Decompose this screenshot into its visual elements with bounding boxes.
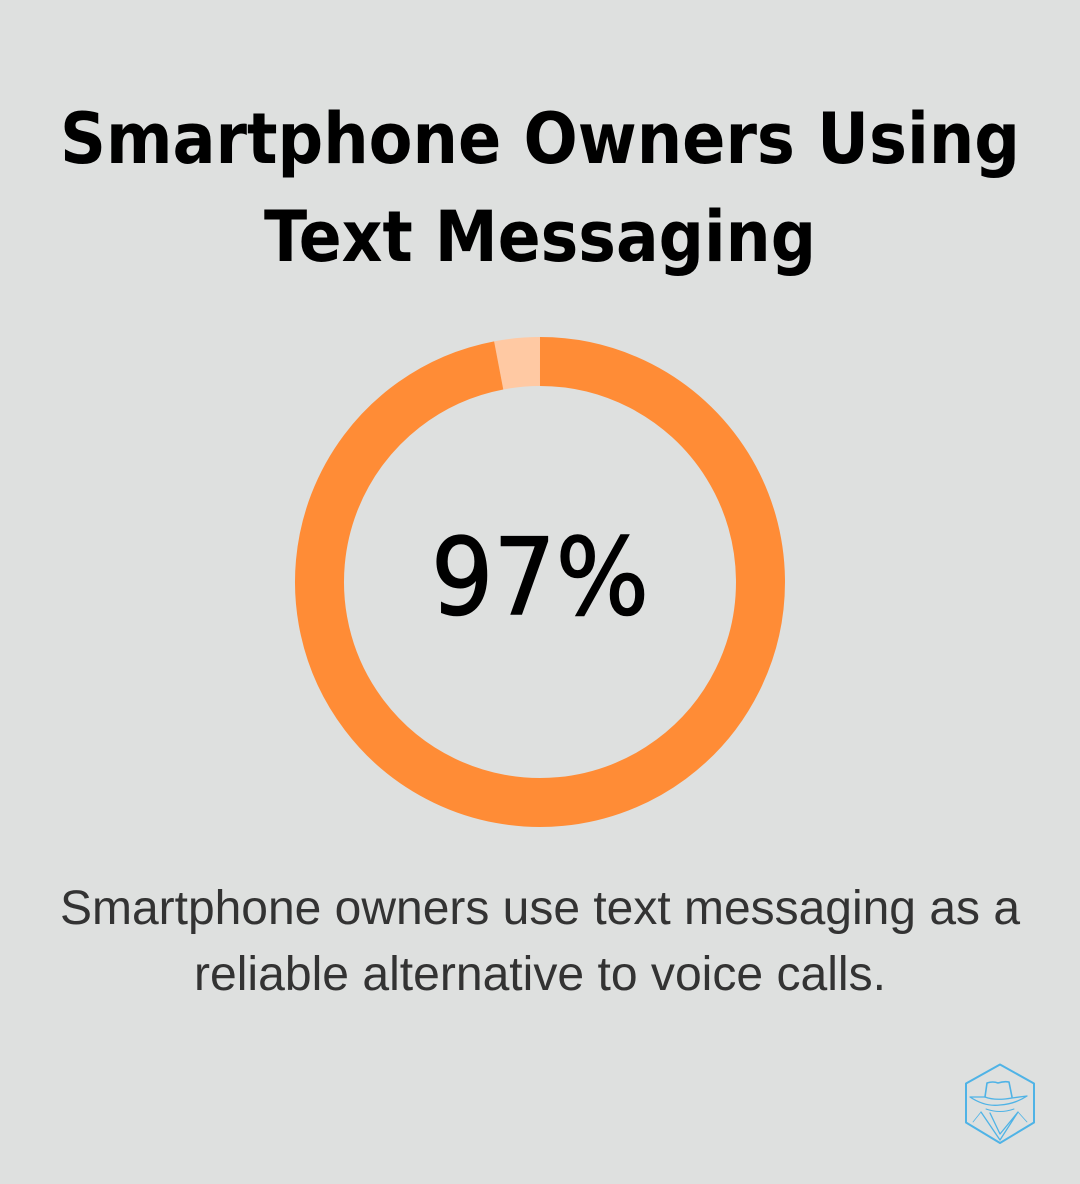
title: Text Messaging — [264, 196, 816, 278]
description text — [60, 882, 1020, 1001]
donut value segment (97%) — [319, 362, 760, 802]
icon: hexagon logo with hat and spy figure — [966, 1064, 1034, 1143]
donut remainder segment (3%) — [499, 362, 540, 365]
donut centre value: 97% — [431, 516, 649, 639]
description text: Smartphone owners use text messaging as a — [60, 882, 1020, 935]
description text: reliable alternative to voice calls. — [194, 948, 886, 1001]
title — [60, 98, 1020, 278]
donut chart: 97 percent — [319, 362, 760, 802]
